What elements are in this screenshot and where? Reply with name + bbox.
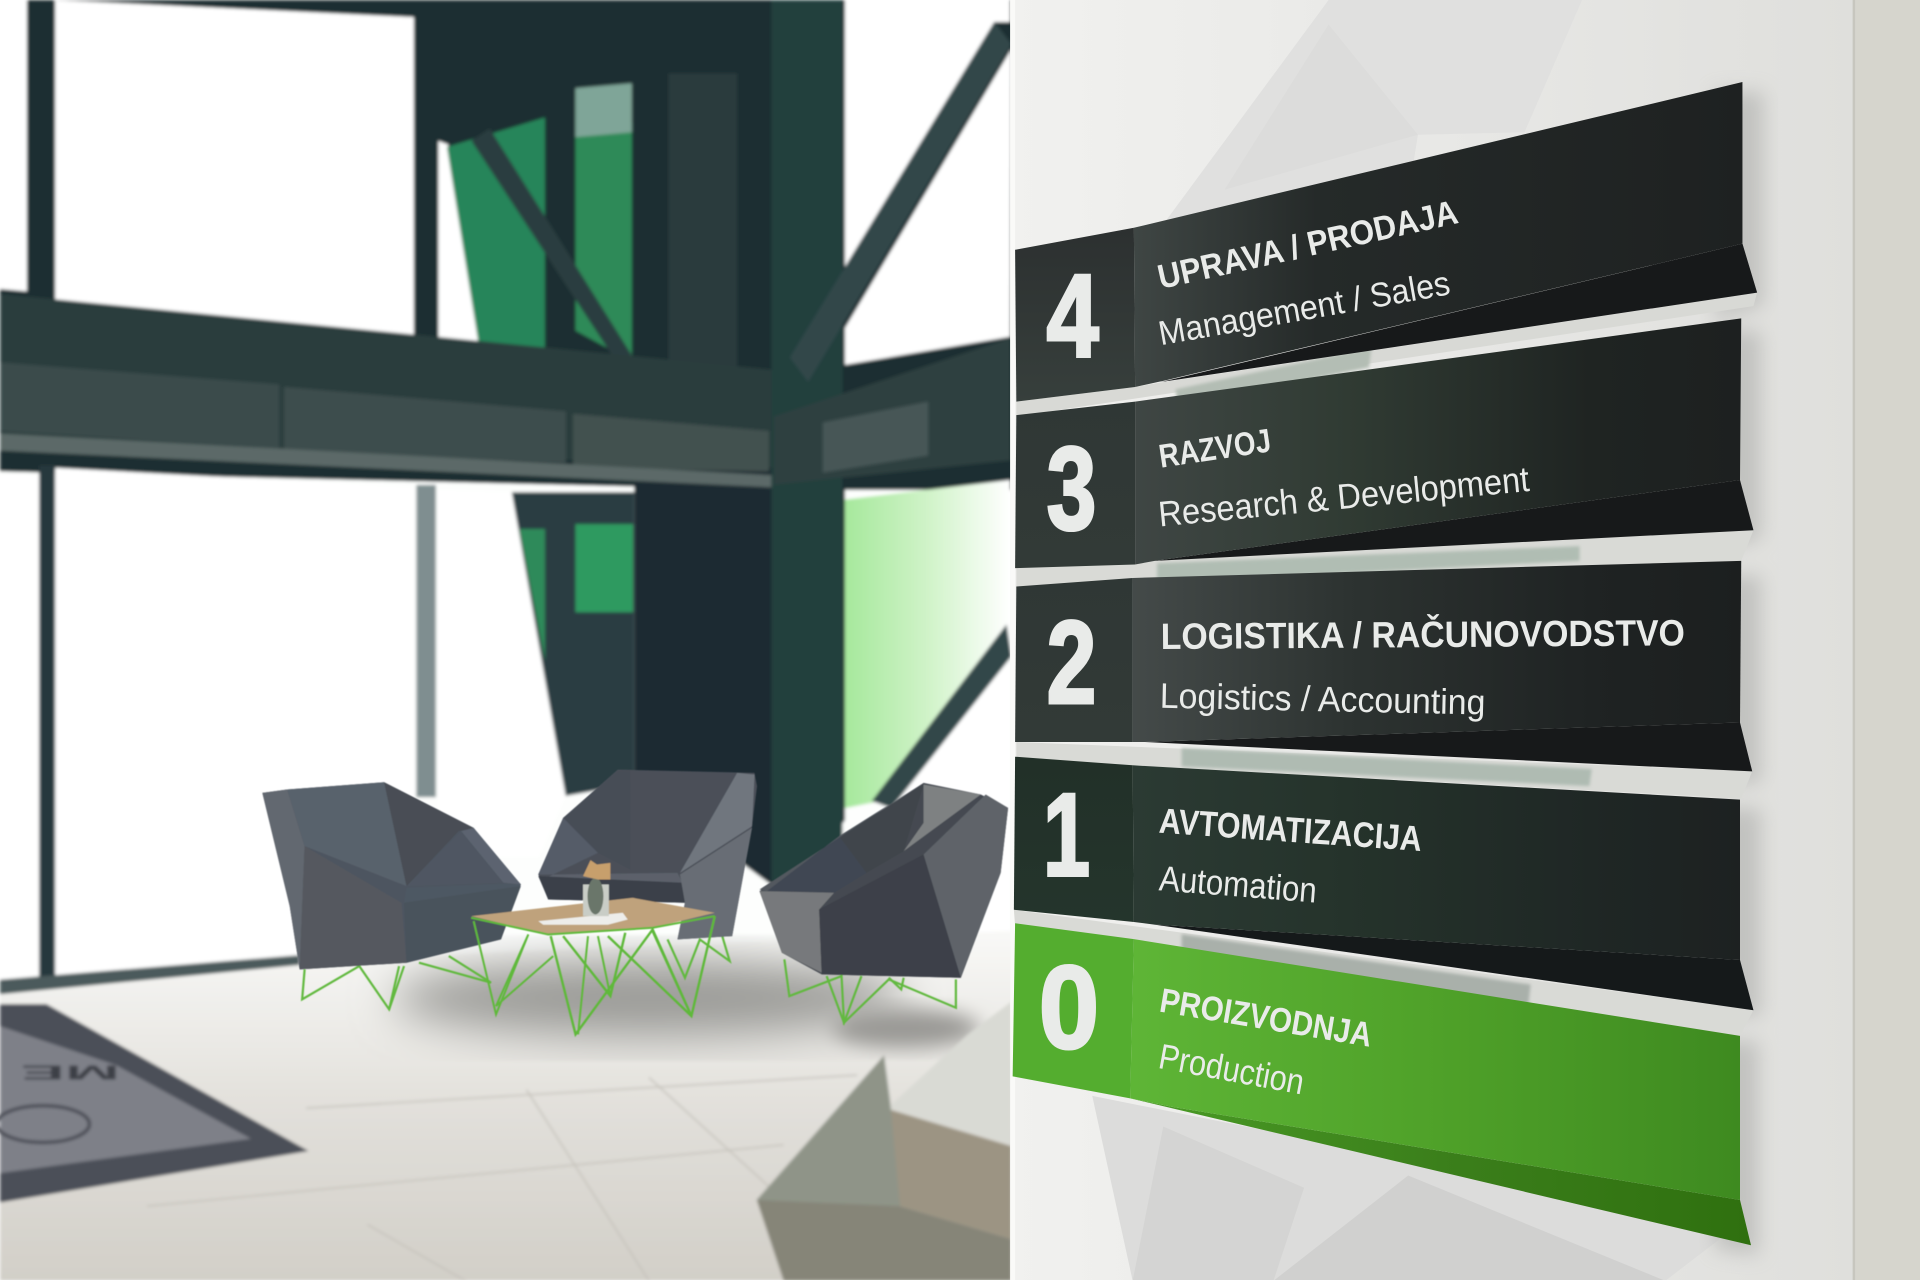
heading and subtitle [1159, 611, 1685, 723]
heading and subtitle: Automation [1158, 858, 1318, 911]
floor [0, 931, 1016, 1280]
sign plate: floor 4 [1015, 82, 1757, 402]
chair: right [760, 783, 1008, 978]
floor tiles [147, 1075, 857, 1280]
chair legs [302, 936, 956, 1023]
heading and subtitle: Research & Development [1157, 459, 1531, 534]
floor number 2: 2 [1047, 597, 1096, 729]
wall facets [1092, 0, 1739, 1280]
glass standoff strips between plates [1014, 293, 1757, 1036]
sign plate: floor 3 [1015, 318, 1753, 568]
floor mat [0, 1004, 309, 1202]
sign plate: floor 2 [1015, 561, 1752, 771]
heading and subtitle: Production [1156, 1036, 1307, 1102]
floor number 1: 1 [1043, 769, 1090, 901]
heading and subtitle: AVTOMATIZACIJA [1158, 801, 1423, 859]
heading and subtitle [1158, 801, 1423, 911]
upper steel beam [0, 294, 1010, 487]
heading and subtitle: UPRAVA / PRODAJA [1154, 193, 1461, 297]
coffee table [471, 860, 715, 1034]
sign plate: floor 1 [1014, 757, 1753, 1010]
heading and subtitle: PROIZVODNJA [1157, 982, 1375, 1055]
heading and subtitle: Management / Sales [1156, 265, 1453, 353]
floor mat: ME [21, 1061, 120, 1083]
floor number 0: 0 [1039, 942, 1099, 1073]
heading and subtitle: Logistics / Accounting [1159, 676, 1486, 723]
chair: middle [538, 770, 757, 939]
lounge furniture: chairs and table [262, 770, 1008, 1034]
floor number 4: 4 [1047, 250, 1099, 382]
stairs [757, 1002, 1011, 1280]
wall column [1010, 0, 1920, 1280]
heading and subtitle [1154, 193, 1461, 353]
heading and subtitle: LOGISTIKA / RAČUNOVODSTVO [1161, 611, 1685, 657]
chair: left [262, 782, 521, 969]
heading and subtitle [1156, 982, 1375, 1102]
sign plate: floor 0 [1013, 923, 1751, 1245]
cast shadows of sign plates [1714, 92, 1763, 1255]
heading and subtitle [1157, 422, 1531, 534]
heading and subtitle: RAZVOJ [1157, 422, 1273, 476]
background: glazed lobby with steel frame [0, 0, 1016, 1280]
floor number 3: 3 [1047, 423, 1096, 555]
